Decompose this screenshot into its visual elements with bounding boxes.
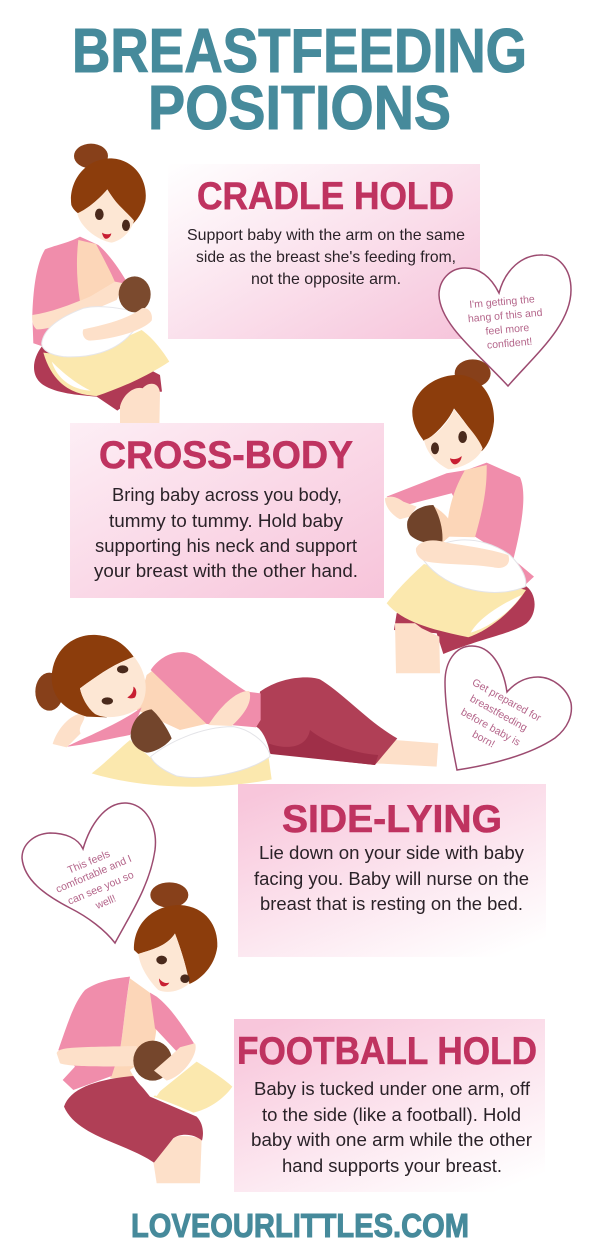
forearm [83, 308, 152, 341]
title [72, 16, 527, 143]
text: cradle hold: Support baby with the arm on the same [187, 227, 465, 244]
heart callout: prepared: before baby is [459, 706, 522, 749]
baby face [430, 505, 453, 543]
heart callout: comfortable: can see you so [66, 869, 136, 908]
mouth [102, 233, 111, 239]
hair bun [35, 673, 63, 711]
chest [137, 670, 208, 730]
swaddle [42, 307, 148, 357]
text: football hold: Baby is tucked under one arm, off [254, 1079, 531, 1099]
heart callout: prepared [445, 646, 571, 770]
swaddle [423, 540, 526, 592]
text: side-lying [254, 843, 529, 914]
panel: side-lying [238, 784, 546, 957]
eyes [156, 956, 167, 964]
heart callout: prepared: breastfeeding [468, 693, 529, 734]
hair bun [150, 882, 188, 908]
heading: football hold: FOOTBALL HOLD [237, 1030, 537, 1073]
illustration: cradle hold mother [32, 144, 169, 430]
title: BREASTFEEDING [72, 16, 527, 86]
forearm [416, 540, 509, 568]
text: side-lying: breast that is resting on the bed. [260, 894, 523, 914]
heading: cradle hold: CRADLE HOLD [197, 175, 454, 218]
text: cross-body [94, 485, 358, 581]
hand [53, 713, 85, 747]
raised hand [385, 497, 417, 519]
heart callout: confident: I'm getting the [469, 293, 535, 311]
arm [57, 1046, 140, 1066]
panel: cradle hold [168, 164, 480, 339]
skirt shadow [268, 730, 378, 765]
text: cross-body: your breast with the other hand. [94, 561, 358, 581]
baby head [133, 1041, 172, 1081]
cardigan [32, 237, 126, 347]
heart callout: confident [439, 255, 571, 386]
cardigan [151, 652, 261, 727]
heading: cross-body: CROSS-BODY [99, 434, 353, 477]
chest [77, 240, 117, 302]
panel: cross-body [70, 423, 384, 598]
cardigan left [58, 977, 130, 1090]
heart callout: comfortable: comfortable and I [54, 853, 134, 896]
legs [395, 623, 440, 673]
chest and tummy [110, 978, 157, 1078]
mouth [450, 456, 462, 464]
baby head [407, 505, 443, 543]
pillow inner [52, 362, 91, 391]
face [80, 657, 146, 717]
cardigan right [150, 993, 194, 1053]
skirt [64, 1076, 203, 1163]
text: side-lying: Lie down on your side with baby [259, 843, 524, 863]
skirt [256, 677, 397, 765]
pillow [387, 564, 526, 637]
heart callout: confident: confident! [486, 336, 533, 352]
heading: side-lying: SIDE-LYING [282, 798, 502, 841]
heart callout: prepared: Get prepared for [470, 676, 543, 725]
pillow [153, 1062, 232, 1113]
forearm [208, 691, 250, 726]
baby head [131, 709, 172, 753]
footer website: LOVEOURLITTLES.COM [131, 1207, 469, 1244]
eyes [95, 209, 104, 220]
text: football hold [251, 1079, 532, 1176]
heart callout: comfortable [22, 803, 155, 943]
pillow [92, 740, 272, 787]
text: cross-body: tummy to tummy. Hold baby [109, 511, 343, 531]
pillow [43, 330, 169, 396]
heart callout: comfortable: This feels [66, 848, 112, 877]
illustration: cross-body mother [385, 359, 535, 673]
lower sleeve [67, 707, 142, 747]
hair [52, 635, 134, 717]
skirt [394, 585, 535, 654]
heart callout: confident: feel more [485, 322, 530, 338]
illustration: football hold mother [57, 882, 232, 1183]
arm [32, 282, 124, 329]
hair bun [455, 359, 491, 387]
eyes [117, 665, 128, 673]
hair bun [74, 144, 108, 168]
text: football hold: baby with one arm while the other [251, 1130, 532, 1150]
hair [71, 158, 146, 226]
right arm [154, 1043, 196, 1081]
chest [448, 465, 487, 537]
skirt [34, 343, 162, 411]
legs [153, 1136, 202, 1183]
text: cross-body: Bring baby across you body, [112, 485, 342, 505]
face [138, 934, 189, 992]
text: football hold: to the side (like a football). Hold [262, 1105, 521, 1125]
face [77, 189, 134, 243]
heart callout: prepared: born! [470, 728, 497, 750]
cardigan [387, 463, 534, 587]
hair [134, 905, 217, 984]
baby head [119, 276, 151, 312]
mouth [159, 978, 169, 986]
face [424, 409, 483, 469]
swaddle [151, 727, 270, 777]
eyes [431, 442, 439, 454]
text: cross-body: supporting his neck and support [95, 536, 357, 556]
heart callout: confident: hang of this and [467, 307, 543, 325]
hair [412, 375, 494, 451]
swaddle [130, 1053, 168, 1096]
text: cradle hold [187, 227, 465, 288]
text: side-lying: facing you. Baby will nurse on the [254, 869, 529, 889]
panel: football hold [234, 1019, 545, 1192]
title: POSITIONS [148, 73, 451, 143]
text: cradle hold: side as the breast she's feeding from, [196, 249, 456, 266]
text: cradle hold: not the opposite arm. [251, 271, 401, 288]
heart callout: comfortable: well! [93, 893, 118, 912]
text: football hold: hand supports your breast. [282, 1156, 502, 1176]
leg [375, 740, 438, 767]
legs [120, 384, 160, 430]
mouth [127, 687, 136, 698]
pillow inner [471, 595, 522, 633]
illustration: side-lying mother [35, 635, 438, 787]
